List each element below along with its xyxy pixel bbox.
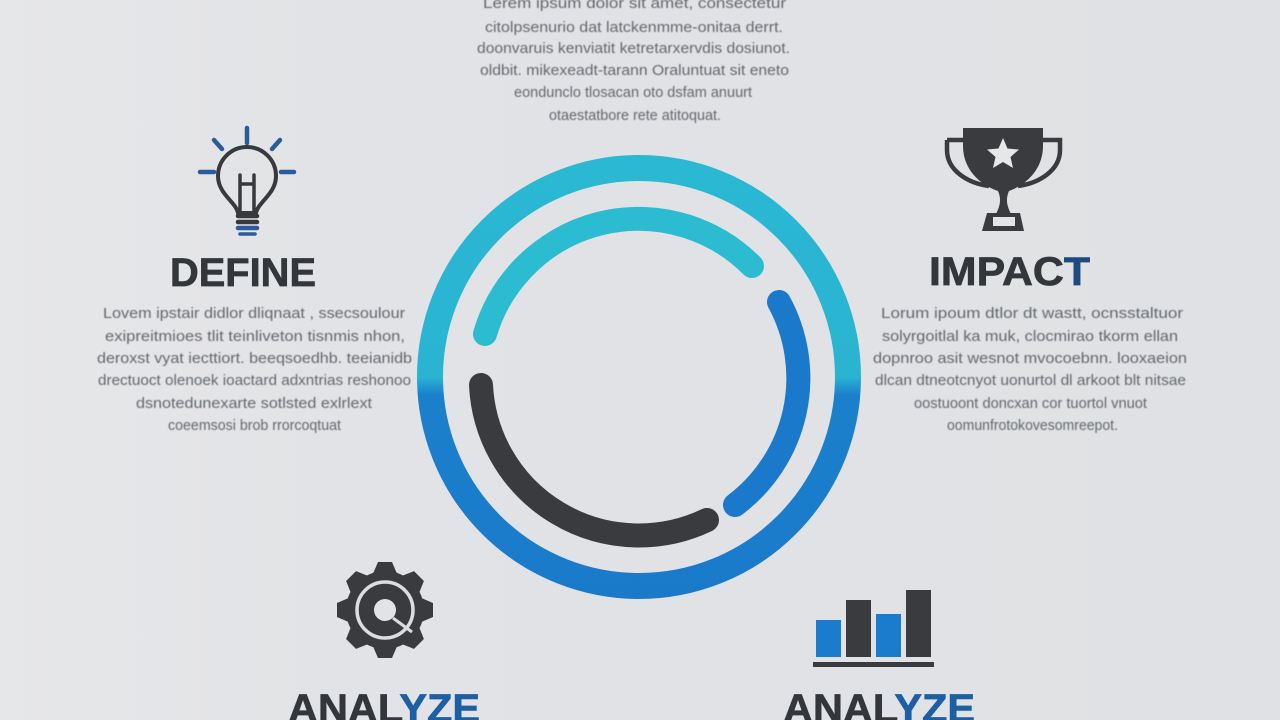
text block: impact: Lorum ipoum dtlor dt wastt, ocnsstaltuor bbox=[881, 305, 1183, 322]
panel: central ring diagram bbox=[430, 168, 848, 586]
heading: impact: IMPACT bbox=[929, 250, 1090, 294]
outer ring bbox=[430, 168, 848, 586]
icon: light bulb bbox=[200, 128, 294, 234]
panel: analyze left bbox=[288, 562, 480, 720]
inner arc: teal bbox=[485, 219, 752, 334]
text block: impact: oomunfrotokovesomreepot. bbox=[947, 417, 1118, 434]
panel: top text block: doonvaruis kenviatit ketretarxervdis dosiunot. bbox=[477, 40, 790, 57]
text block: impact: dlcan dtneotcnyot uonurtol dl arkoot blt nitsae bbox=[875, 372, 1186, 389]
text block: define: Lovem ipstair didlor dliqnaat , ssecsoulour bbox=[103, 305, 405, 322]
text block: impact: solyrgoitlal ka muk, clocmirao tkorm ellan bbox=[882, 328, 1178, 345]
panel: top text block: eondunclo tlosacan oto dsfam anuurt bbox=[514, 84, 753, 101]
icon: gear with magnifier bbox=[337, 562, 433, 658]
text block: define: coeemsosi brob rrorcoqtuat bbox=[168, 417, 342, 434]
icon: trophy bbox=[947, 128, 1060, 231]
text block: define bbox=[97, 305, 412, 434]
panel: top text block: oldbit. mikexeadt-tarann Oraluntuat sit eneto bbox=[480, 62, 789, 79]
text block: impact: dopnroo asit wesnot mvocoebnn. looxaeion bbox=[873, 350, 1187, 367]
icon: bar chart bbox=[813, 590, 934, 667]
text block: define: drectuoct olenoek ioactard adxntrias reshonoo bbox=[98, 372, 411, 389]
text block: define: exipreitmioes tlit teinliveton tisnmis nhon, bbox=[105, 328, 405, 345]
text block: impact bbox=[873, 305, 1187, 434]
text block: impact: oostuoont doncxan cor tuortol vnuot bbox=[914, 395, 1148, 412]
panel: define bbox=[97, 128, 412, 434]
panel: top text block: otaestatbore rete atitoquat. bbox=[549, 107, 721, 124]
text block: define: deroxst vyat iecttiort. beeqsoedhb. teeianidb bbox=[97, 350, 412, 367]
panel: top text block: citolpsenurio dat latckenmme-onitaa derrt. bbox=[485, 19, 783, 36]
inner arc: blue bbox=[735, 302, 798, 505]
text block: define: dsnotedunexarte sotlsted exlrlext bbox=[136, 395, 373, 412]
panel: analyze right bbox=[783, 590, 975, 720]
heading: define: DEFINE bbox=[170, 251, 316, 295]
panel: top text block bbox=[477, 0, 790, 124]
panel: impact bbox=[873, 128, 1187, 434]
inner arc: dark bbox=[481, 385, 707, 535]
